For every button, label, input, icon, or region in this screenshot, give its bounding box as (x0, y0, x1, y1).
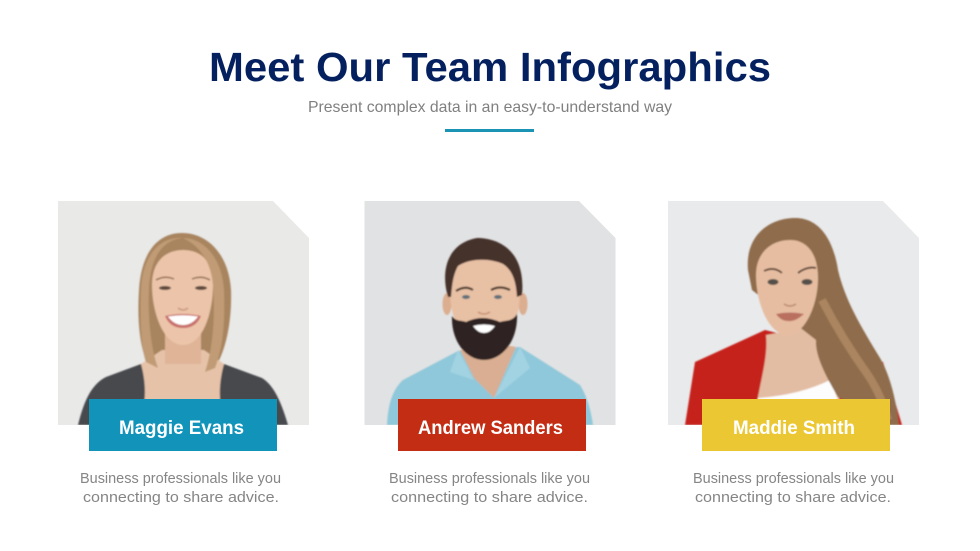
panel: Maggie Evans (58, 201, 309, 506)
description: Maggie Evans: Business professionals like you (80, 470, 281, 487)
portrait: Maggie Evans (58, 201, 309, 425)
name banner: Maggie Evans (89, 399, 277, 451)
description: Andrew Sanders: Business professionals like you (389, 470, 590, 487)
description: Maggie Evans: connecting to share advice. (83, 489, 279, 506)
description: Maddie Smith: connecting to share advice. (695, 489, 891, 506)
name banner: Maggie Evans: Maggie Evans (119, 418, 244, 439)
subtitle: Present complex data in an easy-to-understand way (308, 99, 672, 116)
name banner: Maddie Smith (702, 399, 890, 451)
name banner: Andrew Sanders (398, 399, 586, 451)
portrait: Maddie Smith (668, 201, 919, 425)
panel: Andrew Sanders (364, 201, 616, 506)
description: Maggie Evans (80, 470, 281, 506)
name banner: Andrew Sanders: Andrew Sanders (418, 418, 563, 439)
portrait: Andrew Sanders (364, 201, 616, 425)
title underline accent (445, 129, 534, 132)
title: Meet Our Team Infographics (209, 44, 771, 90)
description: Maddie Smith: Business professionals like you (693, 470, 894, 487)
description: Maddie Smith (693, 470, 894, 506)
description: Andrew Sanders: connecting to share advice. (391, 489, 588, 506)
name banner: Maddie Smith: Maddie Smith (733, 418, 855, 439)
description: Andrew Sanders (389, 470, 590, 506)
panel: Maddie Smith (668, 201, 919, 506)
